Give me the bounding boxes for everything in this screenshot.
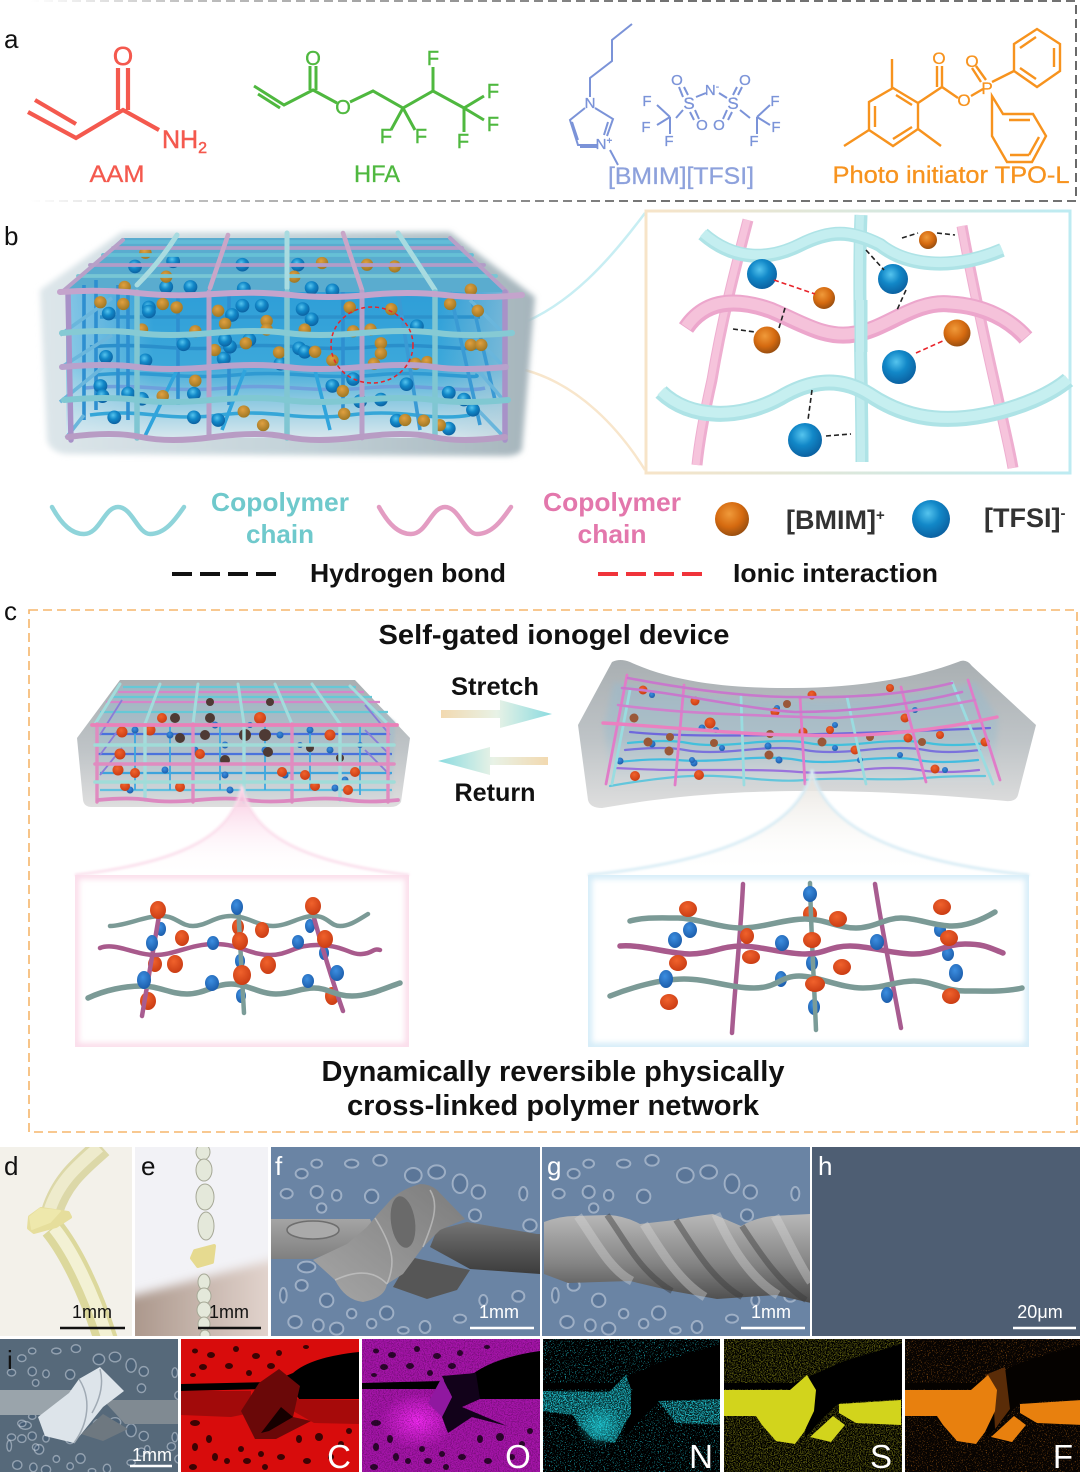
stretched gel xyxy=(578,660,1036,808)
molecule BMIM TFSI: O xyxy=(696,117,708,134)
panel: fluorine map xyxy=(905,1339,1080,1475)
molecule HFA: F xyxy=(457,131,469,153)
molecule BMIM TFSI: O xyxy=(713,117,725,134)
legend: teal copolymer chain: chain xyxy=(246,519,314,549)
molecule HFA: F xyxy=(427,48,439,70)
molecule HFA: O xyxy=(305,48,321,70)
molecule TPO-L: P xyxy=(981,79,993,98)
legend: TFSI anion xyxy=(912,500,1065,538)
return arrow: Return xyxy=(454,779,536,807)
molecule TPO-L xyxy=(832,29,1070,189)
panel i: SEM of knot for mapping: 1mm xyxy=(132,1445,172,1465)
legend: teal copolymer chain xyxy=(52,487,349,549)
panel g: SEM of twisted fiber: g xyxy=(547,1151,561,1181)
legend xyxy=(52,487,1065,588)
panel letter b: b xyxy=(4,221,18,251)
panel: oxygen map: O xyxy=(505,1438,531,1475)
molecule HFA: HFA xyxy=(354,161,400,188)
legend: BMIM cation: + xyxy=(876,507,885,524)
legend: hydrogen bond: Hydrogen bond xyxy=(310,558,506,588)
panel: carbon map xyxy=(181,1339,359,1475)
return arrow xyxy=(438,747,548,807)
molecule AAM: AAM xyxy=(90,161,144,188)
panel d: knotted fiber photo: d xyxy=(4,1151,18,1181)
panel letter a: a xyxy=(4,24,19,54)
zoom funnel left xyxy=(75,786,409,875)
molecule HFA: F xyxy=(487,114,499,136)
molecule BMIM TFSI: F xyxy=(749,133,759,150)
panel g: SEM of twisted fiber: 1mm xyxy=(751,1302,791,1322)
molecule BMIM TFSI: O xyxy=(739,72,751,89)
stretched gel top mesh xyxy=(603,675,1000,785)
molecule HFA: F xyxy=(380,126,392,148)
molecule BMIM TFSI: O xyxy=(671,72,683,89)
molecule TPO-L: O xyxy=(957,91,971,110)
panel h: SEM of smooth surface xyxy=(812,1147,1080,1336)
molecule AAM: NH xyxy=(162,126,198,154)
molecule HFA: O xyxy=(335,97,351,119)
stretched gel lines xyxy=(610,728,990,786)
molecule AAM xyxy=(28,41,207,188)
panel d: knotted fiber photo: 1mm xyxy=(72,1302,112,1322)
molecule BMIM TFSI: S xyxy=(727,94,739,113)
zoomed bond dashes xyxy=(733,233,955,436)
molecule BMIM TFSI xyxy=(570,24,781,190)
molecule HFA xyxy=(254,48,499,188)
stretch arrow: Stretch xyxy=(451,673,539,701)
panel h: SEM of smooth surface: h xyxy=(818,1151,832,1181)
panel e: knotted thread photo: 1mm xyxy=(209,1302,249,1322)
ionogel cube xyxy=(40,232,535,456)
red dashed zoom region xyxy=(331,307,413,383)
legend: TFSI anion: [TFSI] xyxy=(984,503,1060,533)
stretched network chains xyxy=(610,883,1022,1033)
legend: teal copolymer chain: Copolymer xyxy=(211,487,349,517)
molecule BMIM TFSI: [BMIM][TFSI] xyxy=(608,163,754,190)
panel: nitrogen map: N xyxy=(689,1438,713,1475)
molecule HFA: F xyxy=(487,81,499,103)
stretched network detail xyxy=(588,875,1029,1047)
panel: sulfur map xyxy=(724,1339,902,1475)
panel f: SEM of knot xyxy=(271,1147,540,1336)
legend: pink copolymer chain: chain xyxy=(578,519,646,549)
panel c caption: Dynamically reversible physically xyxy=(322,1056,784,1088)
panel h: SEM of smooth surface: 20μm xyxy=(1017,1302,1063,1322)
copolymer tubes xyxy=(661,215,1068,468)
blue and orange spheres xyxy=(93,247,488,435)
legend: BMIM cation: [BMIM] xyxy=(786,505,876,535)
zoom connector curves xyxy=(518,213,645,470)
legend: ionic interaction: Ionic interaction xyxy=(733,558,938,588)
panel c caption: cross-linked polymer network xyxy=(347,1090,760,1122)
zoomed spheres xyxy=(747,231,970,457)
panel c heading: Self-gated ionogel device xyxy=(378,619,730,650)
relaxed gel back lines xyxy=(98,687,392,795)
molecule AAM: O xyxy=(113,41,133,71)
panel e: knotted thread photo: e xyxy=(141,1151,155,1181)
molecule TPO-L: Photo initiator TPO-L xyxy=(832,162,1070,189)
molecule BMIM TFSI: N xyxy=(705,82,716,99)
molecule HFA: F xyxy=(415,126,427,148)
panel: oxygen map xyxy=(362,1339,540,1475)
panel: nitrogen map xyxy=(543,1339,720,1475)
panel: fluorine map: F xyxy=(1053,1438,1073,1475)
relaxed network chains xyxy=(88,904,400,1016)
legend: BMIM cation xyxy=(715,502,885,536)
panel a: chemical structures xyxy=(4,1,1076,201)
panel d: knotted fiber photo xyxy=(0,1147,132,1336)
molecule BMIM TFSI: F xyxy=(664,133,674,150)
panel f: SEM of knot: f xyxy=(275,1151,283,1181)
panel c: self-gated ionogel device xyxy=(4,596,1077,1132)
molecule BMIM TFSI: - xyxy=(716,82,719,93)
zoom funnel right xyxy=(588,770,1029,875)
molecule BMIM TFSI: F xyxy=(771,119,781,136)
relaxed gel xyxy=(77,680,410,807)
panel b: polymer network illustration xyxy=(4,211,1070,473)
legend: pink copolymer chain: Copolymer xyxy=(543,487,681,517)
stretched gel ions xyxy=(616,684,990,781)
stretched network spheres behind xyxy=(775,906,954,1015)
panel i: SEM of knot for mapping xyxy=(0,1339,178,1472)
molecule BMIM TFSI: N xyxy=(585,95,595,112)
stretch arrow xyxy=(441,673,552,728)
molecule BMIM TFSI: F xyxy=(770,93,780,110)
relaxed gel ions xyxy=(112,698,363,795)
panel: sulfur map: S xyxy=(870,1438,892,1475)
panel c dashed frame xyxy=(29,610,1077,1132)
molecule TPO-L: O xyxy=(932,49,946,68)
panel a dashed border xyxy=(30,1,1076,201)
panel: carbon map: C xyxy=(327,1438,351,1475)
legend: TFSI anion: - xyxy=(1060,505,1065,522)
back grid xyxy=(60,280,505,438)
panel i: SEM of knot for mapping: i xyxy=(7,1345,13,1375)
panel e: knotted thread photo xyxy=(135,1147,268,1336)
relaxed network spheres front xyxy=(137,897,344,991)
panel g: SEM of twisted fiber xyxy=(542,1147,810,1336)
molecule BMIM TFSI: + xyxy=(606,136,612,147)
molecule BMIM TFSI: F xyxy=(641,119,651,136)
legend: pink copolymer chain xyxy=(379,487,681,549)
molecule AAM: 2 xyxy=(198,140,207,157)
panel letter c: c xyxy=(4,596,17,626)
molecule BMIM TFSI: N xyxy=(596,136,606,153)
front grid xyxy=(60,291,522,440)
relaxed network detail xyxy=(75,875,409,1047)
relaxed gel front lines xyxy=(92,684,398,802)
relaxed network spheres behind xyxy=(140,919,339,1010)
top grid xyxy=(62,233,507,292)
molecule TPO-L: O xyxy=(965,52,979,71)
panel c caption xyxy=(322,1056,784,1122)
molecule BMIM TFSI: S xyxy=(683,94,695,113)
panel f: SEM of knot: 1mm xyxy=(479,1302,519,1322)
stretched network spheres front xyxy=(659,886,963,1010)
molecule BMIM TFSI: F xyxy=(642,93,652,110)
zoomed network frame xyxy=(646,211,1070,473)
